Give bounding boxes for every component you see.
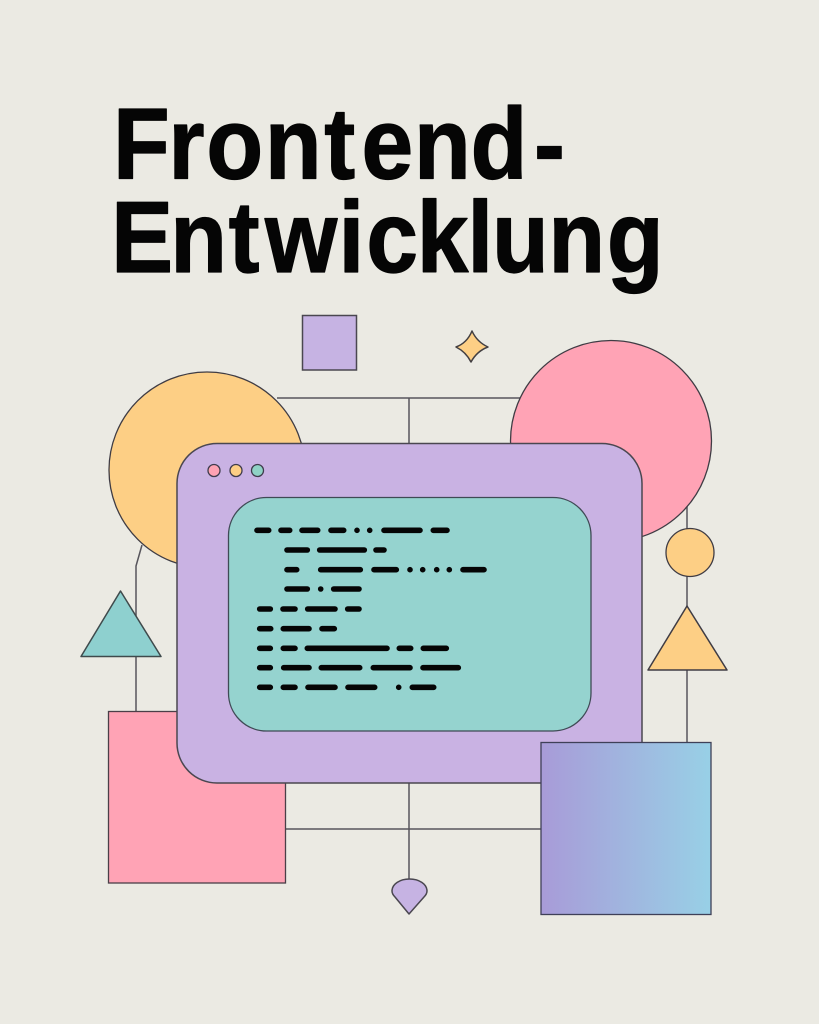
square: purple top bbox=[302, 316, 356, 370]
title: Frontend- bbox=[113, 87, 565, 200]
triangle: orange right bbox=[648, 606, 727, 670]
circle: orange bbox=[109, 372, 305, 568]
title: Entwicklung bbox=[111, 181, 664, 294]
icon: purple drop bbox=[392, 879, 427, 914]
circle: pink bbox=[510, 340, 712, 542]
code lines bbox=[257, 530, 484, 687]
square: gradient bottom right bbox=[541, 742, 711, 914]
triangle: teal left bbox=[81, 591, 161, 656]
window control dots bbox=[208, 464, 264, 476]
small circle: orange right bbox=[666, 528, 714, 576]
connector lines bbox=[136, 398, 687, 880]
square: pink bottom left bbox=[108, 712, 286, 883]
icon: sparkle star bbox=[456, 331, 488, 362]
title bbox=[111, 87, 664, 294]
code screen panel bbox=[228, 498, 591, 731]
browser window panel bbox=[177, 444, 642, 783]
